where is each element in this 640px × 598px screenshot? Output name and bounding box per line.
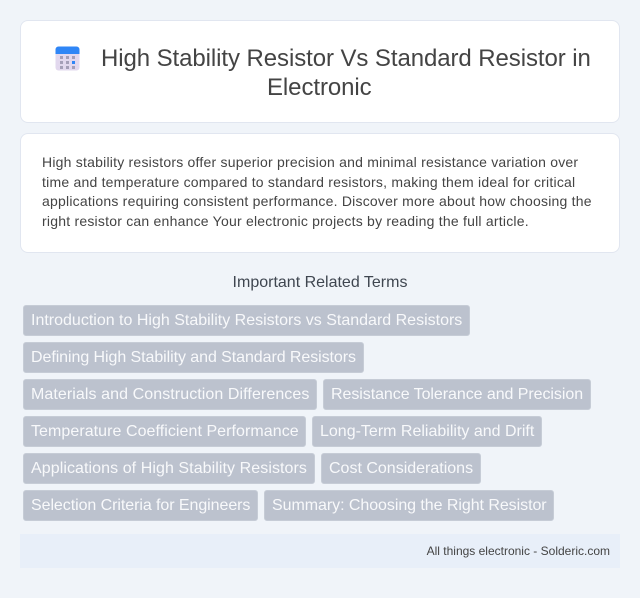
title: Electronic bbox=[267, 74, 372, 101]
intro paragraph: High stability resistors offer superior precision and minimal resistance variation over bbox=[42, 154, 578, 170]
chip: summary: Summary: Choosing the Right Resistor bbox=[272, 497, 547, 514]
footer text: All things electronic - Solderic.com bbox=[427, 544, 610, 558]
intro paragraph: right resistor can enhance Your electronic projects by reading the full article. bbox=[42, 213, 529, 229]
chip: materials: Materials and Construction Differences bbox=[31, 386, 309, 403]
chip: cost bbox=[321, 453, 481, 484]
chip: applications bbox=[23, 453, 315, 484]
chip: summary bbox=[264, 490, 554, 521]
chip: tolerance: Resistance Tolerance and Precision bbox=[331, 386, 583, 403]
chip: introduction bbox=[23, 305, 470, 336]
chip: reliability bbox=[312, 416, 542, 447]
header card bbox=[20, 20, 620, 123]
section heading: Important Related Terms bbox=[233, 274, 407, 291]
title: High Stability Resistor Vs Standard Resistor in bbox=[101, 45, 591, 72]
footer bbox=[20, 534, 620, 568]
chip: defining bbox=[23, 342, 364, 373]
intro paragraph bbox=[42, 154, 592, 229]
chip: selection bbox=[23, 490, 258, 521]
intro paragraph: time and temperature compared to standard resistors, making them ideal for critical bbox=[42, 174, 575, 190]
intro text panel bbox=[20, 133, 620, 253]
chip: temperature: Temperature Coefficient Performance bbox=[31, 423, 299, 440]
term chips bbox=[23, 305, 591, 521]
intro paragraph: applications requiring consistent performance. Discover more about how choosing the bbox=[42, 193, 592, 209]
chip: defining: Defining High Stability and Standard Resistors bbox=[31, 349, 356, 366]
icon: calendar bbox=[56, 46, 80, 70]
chip: temperature bbox=[23, 416, 306, 447]
chip: tolerance bbox=[323, 379, 591, 410]
chip: cost: Cost Considerations bbox=[329, 460, 473, 477]
chip: materials bbox=[23, 379, 317, 410]
chip: introduction: Introduction to High Stability Resistors vs Standard Resistors bbox=[31, 312, 462, 329]
chip: selection: Selection Criteria for Engineers bbox=[31, 497, 250, 514]
title bbox=[101, 45, 591, 101]
chip: reliability: Long-Term Reliability and Drift bbox=[320, 423, 534, 440]
chip: applications: Applications of High Stability Resistors bbox=[31, 460, 307, 477]
